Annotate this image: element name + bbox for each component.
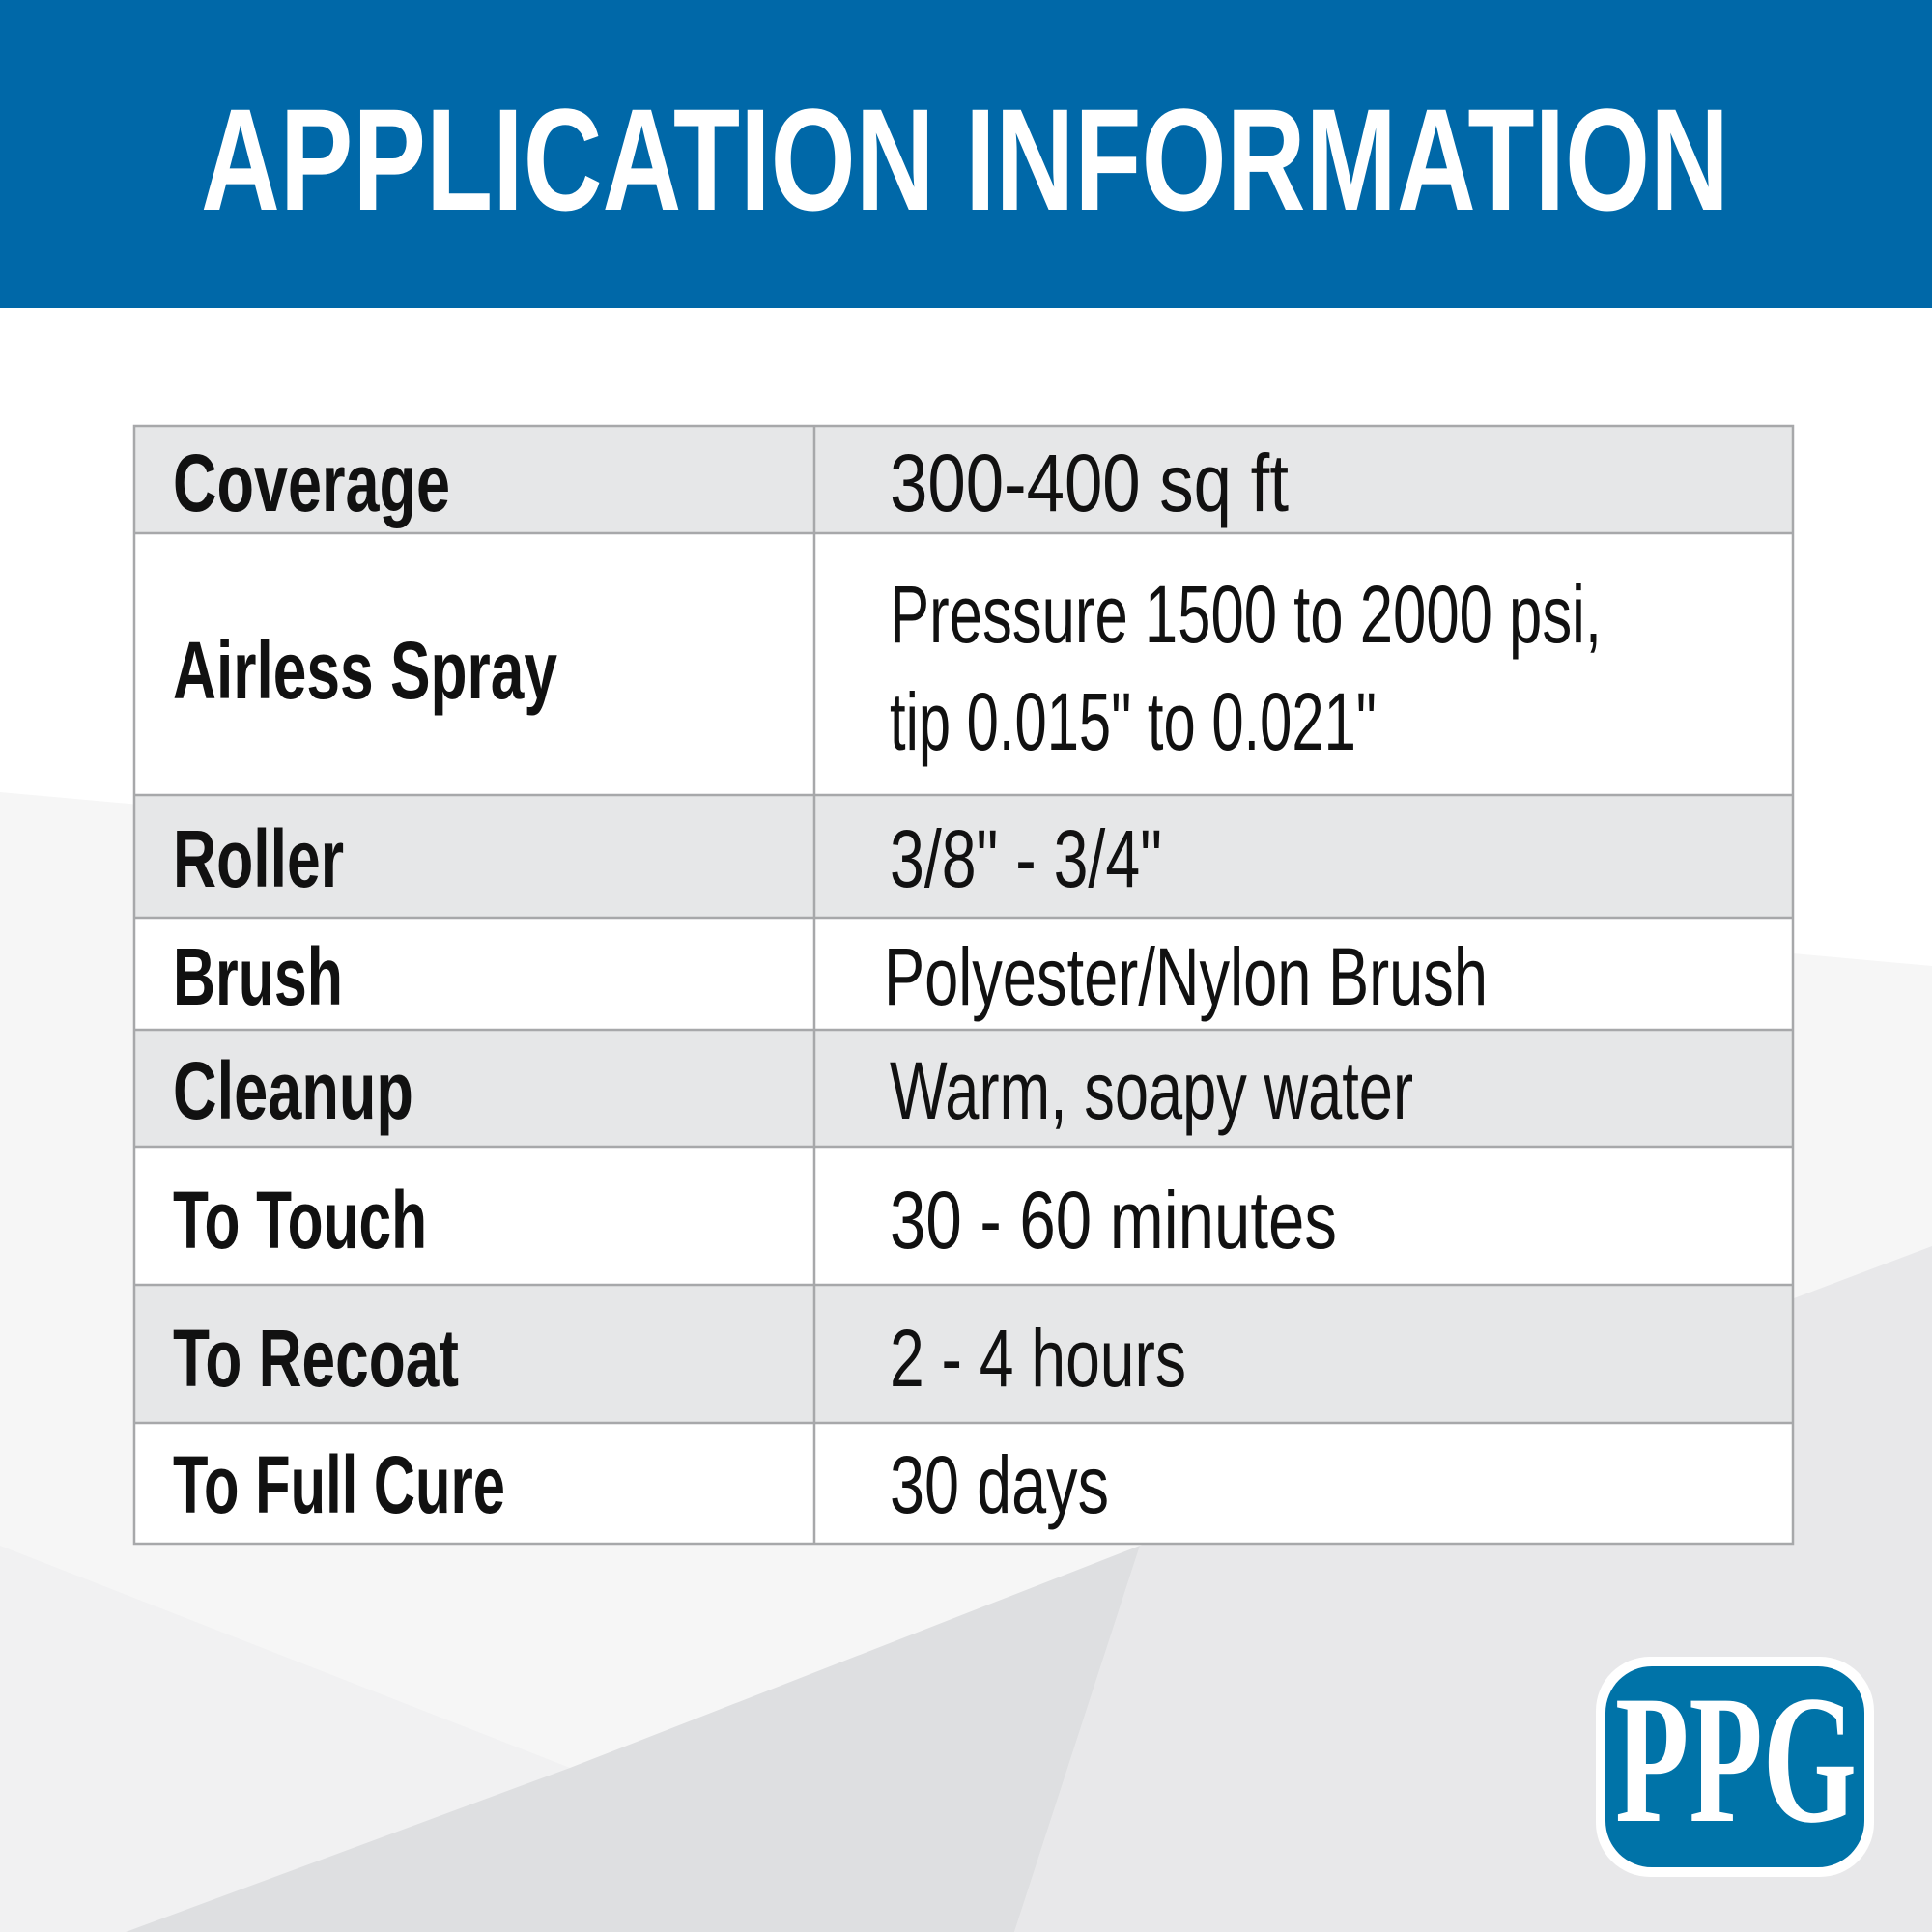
- row: to recoat: To Recoat: [173, 1313, 459, 1404]
- row: cleanup: Warm, soapy water: [890, 1045, 1413, 1136]
- row: to full cure: [173, 1439, 1109, 1530]
- header banner: [0, 0, 1932, 308]
- row: brush: Polyester/Nylon Brush: [884, 931, 1488, 1022]
- row: coverage: Coverage: [173, 438, 450, 528]
- row: cleanup: [173, 1045, 1413, 1136]
- row: brush: [173, 931, 1488, 1022]
- row: airless spray: [173, 569, 1602, 767]
- row: roller: Roller: [173, 813, 344, 904]
- row: cleanup: Cleanup: [173, 1045, 413, 1136]
- row: to touch: To Touch: [173, 1175, 427, 1265]
- row: to full cure: 30 days: [890, 1439, 1109, 1530]
- row: to recoat: [173, 1313, 1186, 1404]
- row: to touch: [173, 1175, 1337, 1265]
- row: to touch: 30 - 60 minutes: [890, 1175, 1337, 1265]
- row: brush: Brush: [173, 931, 343, 1022]
- row: airless spray: Pressure 1500 to 2000 psi,: [890, 569, 1602, 660]
- row: to recoat: 2 - 4 hours: [890, 1313, 1186, 1404]
- row: roller: 3/8" - 3/4": [890, 813, 1162, 904]
- row: airless spray: tip 0.015" to 0.021": [890, 676, 1377, 767]
- table: [134, 426, 1793, 1544]
- row: coverage: [173, 438, 1289, 528]
- row: coverage: 300-400 sq ft: [890, 438, 1289, 528]
- row: airless spray: Airless Spray: [173, 625, 557, 716]
- row: roller: [173, 813, 1162, 904]
- row: to full cure: To Full Cure: [173, 1439, 505, 1530]
